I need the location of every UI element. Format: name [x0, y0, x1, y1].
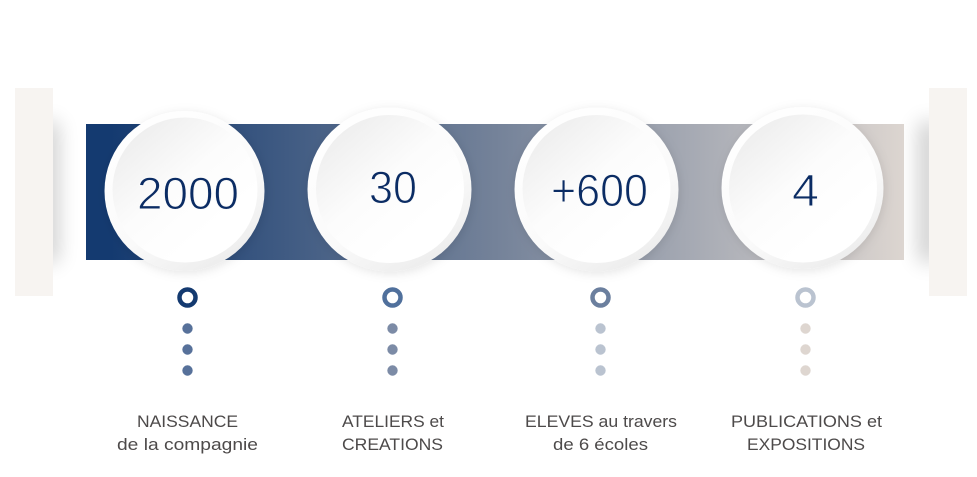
- label: publications: [731, 412, 882, 454]
- label: eleves: de 6 écoles: [553, 435, 648, 454]
- label: eleves: [525, 412, 677, 454]
- right side panel: [929, 88, 967, 296]
- label: naissance: NAISSANCE: [137, 412, 238, 431]
- dot column 2: [384, 290, 400, 376]
- stat circle: 2000: [104, 111, 264, 271]
- dot column 3: [592, 290, 608, 376]
- stat circle: +600: +600: [551, 165, 648, 216]
- stat circle: 4: 4: [792, 165, 819, 216]
- stat circle: +600: [514, 108, 678, 272]
- left panel shadow: [38, 122, 58, 262]
- dot column 1: [180, 290, 196, 376]
- label: naissance: de la compagnie: [117, 435, 258, 454]
- label: publications: PUBLICATIONS et: [731, 412, 882, 431]
- gradient timeline bar: [86, 124, 904, 260]
- right panel shadow: [919, 122, 939, 262]
- left side panel: [15, 88, 53, 296]
- label: eleves: ELEVES au travers: [525, 412, 677, 431]
- label: ateliers: CREATIONS: [342, 435, 443, 454]
- label: ateliers: [342, 412, 444, 454]
- stat circle: 4: [722, 107, 884, 269]
- stat circle: 2000: 2000: [137, 168, 239, 219]
- label: naissance: [117, 412, 258, 454]
- stat circle: 30: [308, 108, 472, 272]
- dot column 4: [798, 290, 814, 376]
- label: publications: EXPOSITIONS: [747, 435, 865, 454]
- stat circle: 30: 30: [369, 162, 417, 213]
- label: ateliers: ATELIERS et: [342, 412, 444, 431]
